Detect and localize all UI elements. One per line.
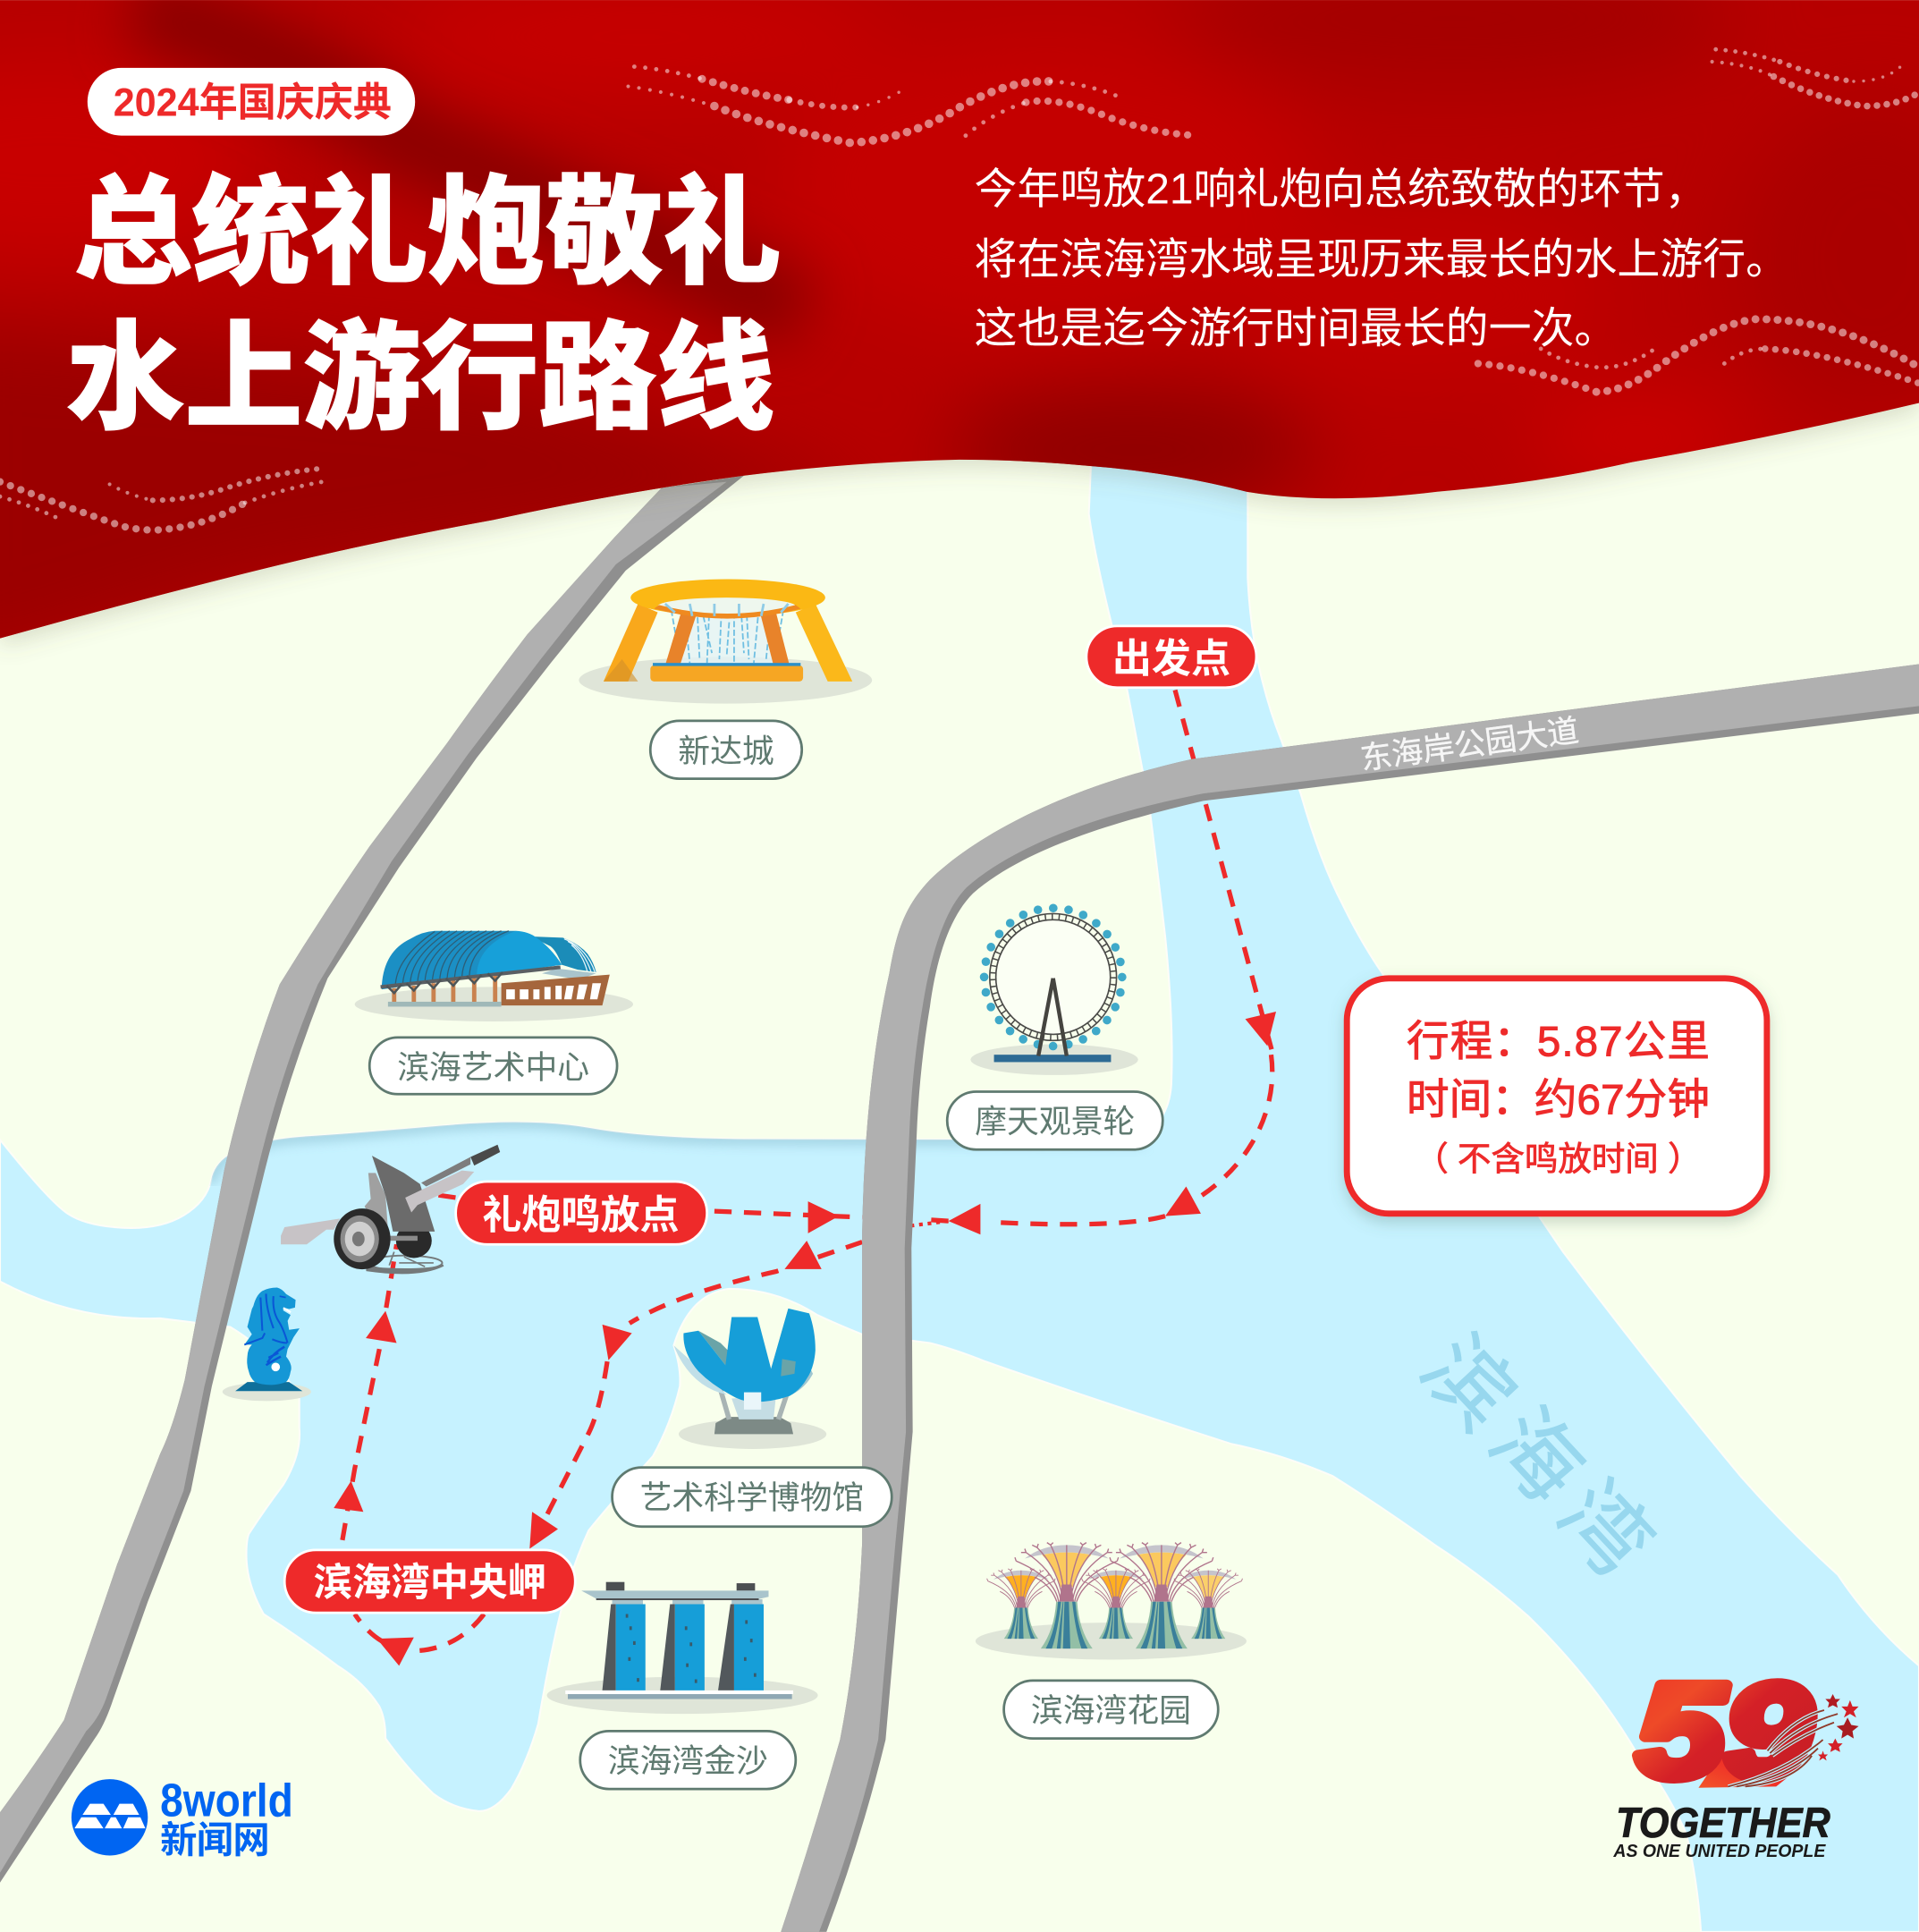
label: cannon firing point	[456, 1182, 707, 1244]
label: cannon firing point: 礼炮鸣放点	[482, 1193, 680, 1237]
text block: intro paragraph: 今年鸣放21响礼炮向总统致敬的环节，	[975, 165, 1708, 213]
logo: 8world: 新闻网	[160, 1820, 270, 1861]
logo: National Day 59: 59	[1637, 1656, 1812, 1805]
label: ArtScience Museum	[613, 1468, 892, 1527]
decoration: dotted waves middle right	[1478, 319, 1919, 392]
text block: intro paragraph	[975, 165, 1788, 352]
label: Singapore Flyer	[947, 1091, 1162, 1149]
label: departure point	[1086, 626, 1256, 688]
label: Marina Bay Sands: 滨海湾金沙	[608, 1743, 768, 1779]
icon: Singapore Flyer	[970, 908, 1138, 1075]
water name label: 滨海湾	[1404, 1319, 1678, 1604]
callout: distance and time	[1347, 979, 1767, 1214]
decoration: dotted waves left	[0, 469, 330, 530]
callout: distance and time: 时间：约67分钟	[1407, 1076, 1710, 1123]
icon: Merlion	[223, 1288, 311, 1401]
icon: Esplanade	[355, 931, 633, 1021]
label: Gardens by the Bay: 滨海湾花园	[1031, 1692, 1191, 1728]
road: East Coast Parkway	[781, 665, 1919, 1932]
decoration: dotted waves top right	[1712, 49, 1919, 106]
logo: 8world	[72, 1775, 293, 1861]
title	[66, 167, 781, 445]
label: Esplanade: 滨海艺术中心	[397, 1049, 589, 1085]
logo: 8world: 8world	[160, 1775, 293, 1826]
icon: Suntec fountain	[579, 579, 872, 704]
logo: National Day 59	[1612, 1656, 1859, 1861]
road name label: 东海岸公园大道	[1358, 714, 1581, 776]
icon: howitzer cannon	[281, 1145, 500, 1273]
panel: red banner	[0, 0, 1919, 690]
route: dashed parade path	[342, 690, 1272, 1651]
text block: intro paragraph: 将在滨海湾水域呈现历来最长的水上游行。	[975, 236, 1788, 284]
logo: National Day 59: TOGETHER	[1616, 1800, 1830, 1846]
title: 水上游行路线	[66, 312, 774, 445]
label: Marina Bay Sands	[580, 1731, 796, 1789]
callout: distance and time: （ 不含鸣放时间 ）	[1415, 1140, 1702, 1178]
badge: 2024 National Day Parade: 2024年国庆庆典	[114, 81, 392, 125]
text block: intro paragraph: 这也是迄今游行时间最长的一次。	[975, 305, 1617, 352]
icon: Marina Bay Sands	[547, 1582, 818, 1714]
label: central cape: 滨海湾中央岬	[314, 1562, 546, 1605]
title: 总统礼炮敬礼	[74, 167, 781, 300]
label: Singapore Flyer: 摩天观景轮	[975, 1104, 1135, 1140]
label: departure point: 出发点	[1112, 637, 1230, 681]
callout: distance and time: 行程：5.87公里	[1407, 1019, 1710, 1066]
label: central cape	[284, 1550, 575, 1613]
icon: ArtScience Museum	[673, 1309, 826, 1449]
label: Esplanade	[369, 1038, 617, 1094]
route arrowheads	[334, 1012, 1276, 1665]
badge: 2024 National Day Parade	[88, 68, 415, 136]
label: Suntec City: 新达城	[678, 733, 774, 769]
label: Suntec City	[650, 721, 802, 779]
label: ArtScience Museum: 艺术科学博物馆	[640, 1480, 864, 1516]
label: Gardens by the Bay	[1004, 1681, 1218, 1739]
logo: National Day 59: AS ONE UNITED PEOPLE	[1612, 1841, 1826, 1861]
decoration: dotted waves top center	[628, 66, 1197, 143]
water: bay and river	[0, 456, 1919, 1932]
road: left road	[0, 476, 744, 1883]
icon: Supertrees	[976, 1543, 1247, 1659]
